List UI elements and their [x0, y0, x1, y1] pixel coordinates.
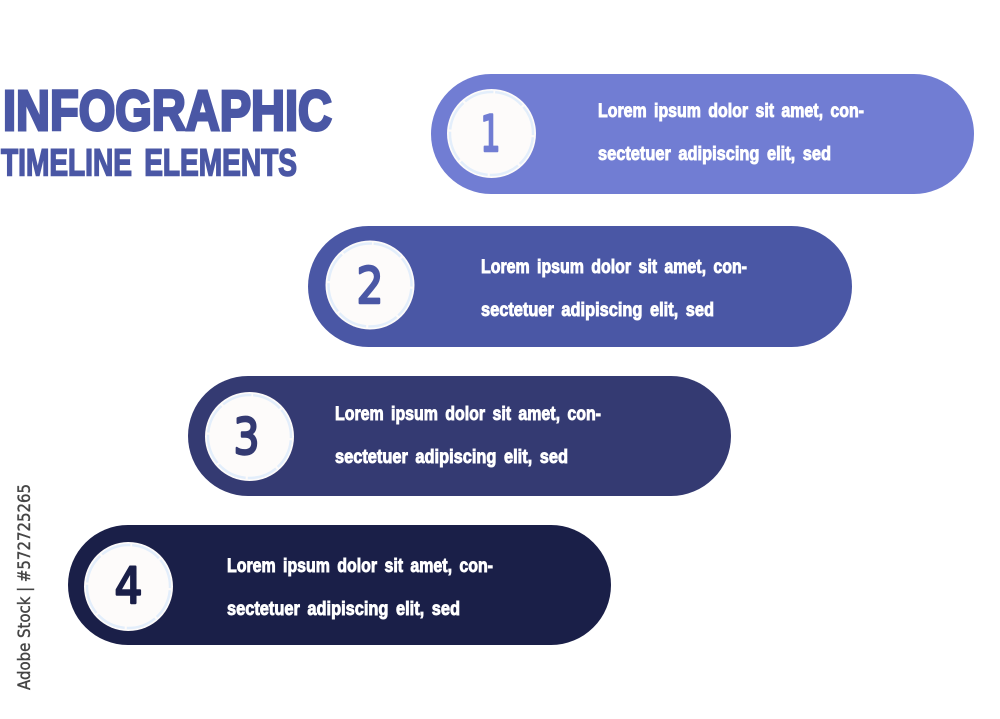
title: [1, 79, 332, 184]
panel: step 2: [308, 226, 852, 347]
step 2 number badge: [325, 240, 415, 330]
step 3 pill: [188, 376, 731, 496]
step 4 text: [227, 556, 493, 620]
step 1 text: [598, 101, 864, 165]
step 2 text: Lorem ipsum dolor sit amet, con-: [481, 257, 747, 278]
step 2 text: sectetuer adipiscing elit, sed: [481, 300, 714, 321]
step 1 number badge: [447, 89, 536, 178]
subtitle: timeline elements: TIMELINE ELEMENTS: [1, 142, 297, 184]
title line: infographic: INFOGRAPHIC: [3, 79, 332, 143]
step 2 text: [481, 257, 747, 321]
step 4 text: Lorem ipsum dolor sit amet, con-: [227, 556, 493, 577]
step 3 number badge: [205, 392, 294, 481]
side credit text: Adobe Stock | #572725265: [15, 484, 35, 690]
step 1 text: sectetuer adipiscing elit, sed: [598, 144, 831, 165]
step 4 pill: [68, 525, 611, 645]
step 3 number badge: 3: [234, 408, 260, 466]
step 1 number badge: 1: [480, 105, 500, 163]
step 2 number badge: 2: [356, 257, 384, 315]
step 4 number badge: [84, 542, 173, 631]
panel: step 3: [188, 376, 731, 496]
step 3 text: [335, 404, 601, 468]
step 2 pill: [308, 226, 852, 347]
step 1 text: Lorem ipsum dolor sit amet, con-: [598, 101, 864, 122]
step 4 number badge: 4: [114, 557, 142, 615]
step 3 text: Lorem ipsum dolor sit amet, con-: [335, 404, 601, 425]
step 4 text: sectetuer adipiscing elit, sed: [227, 599, 460, 620]
step 1 pill: [431, 74, 974, 194]
step 3 text: sectetuer adipiscing elit, sed: [335, 447, 568, 468]
panel: step 1: [431, 74, 974, 194]
panel: step 4: [68, 525, 611, 645]
